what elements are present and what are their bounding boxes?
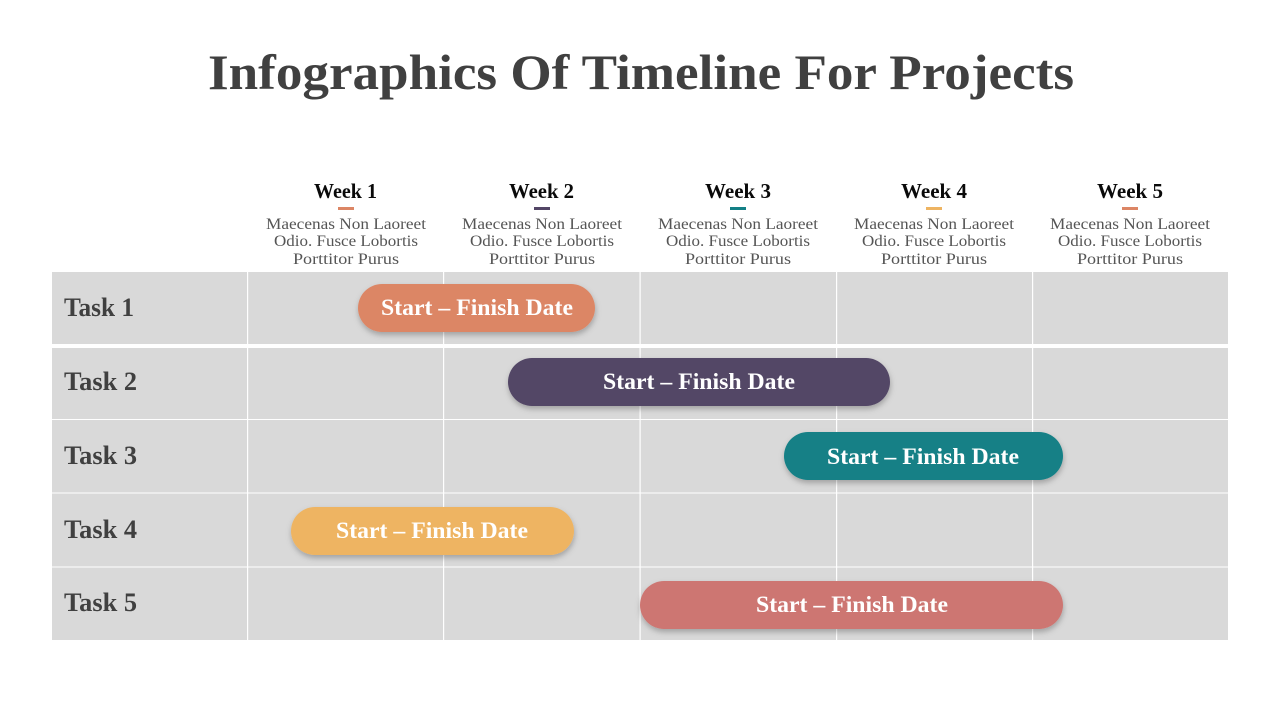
week 4 header: [854, 179, 1015, 268]
week 1 header: Week 1: [314, 179, 377, 203]
task 4 bar: [291, 507, 574, 555]
task labels: [64, 293, 137, 617]
week 2 header: Porttitor Purus: [489, 251, 595, 268]
week 4 header: Maecenas Non Laoreet: [854, 216, 1015, 233]
task labels: Task 4: [64, 515, 137, 544]
week 5 header: Odio. Fusce Lobortis: [1058, 233, 1202, 250]
week 4 header: Porttitor Purus: [881, 251, 987, 268]
week 3 header: Maecenas Non Laoreet: [658, 216, 819, 233]
task 2 bar: [508, 358, 890, 406]
week 4 header: Week 4: [901, 179, 967, 203]
task 4 bar: Start – Finish Date: [336, 518, 528, 543]
week 3 header: Week 3: [705, 179, 771, 203]
task 5 bar: [640, 581, 1063, 629]
week 3 header: [658, 179, 819, 268]
week 1 header: Odio. Fusce Lobortis: [274, 233, 418, 250]
week 2 header: Week 2: [509, 179, 574, 203]
task labels: Task 2: [64, 367, 137, 396]
week headers: [266, 179, 1211, 268]
task 2 bar: Start – Finish Date: [603, 369, 795, 394]
week 4 header: Odio. Fusce Lobortis: [862, 233, 1006, 250]
task labels: Task 3: [64, 441, 137, 470]
task 3 bar: [784, 432, 1063, 480]
week 5 header: Week 5: [1097, 179, 1163, 203]
task 1 bar: [358, 284, 595, 332]
task 5 bar: Start – Finish Date: [756, 592, 948, 617]
gantt grid: [52, 272, 1228, 640]
week 5 header: Maecenas Non Laoreet: [1050, 216, 1211, 233]
week 2 header: Odio. Fusce Lobortis: [470, 233, 614, 250]
week 1 header: Maecenas Non Laoreet: [266, 216, 427, 233]
week 5 header: Porttitor Purus: [1077, 251, 1183, 268]
week 2 header: [462, 179, 623, 268]
week 2 header: Maecenas Non Laoreet: [462, 216, 623, 233]
week 1 header: Porttitor Purus: [293, 251, 399, 268]
task 1 bar: Start – Finish Date: [381, 295, 573, 320]
task 3 bar: Start – Finish Date: [827, 444, 1019, 469]
week 3 header: Porttitor Purus: [685, 251, 791, 268]
task labels: Task 5: [64, 588, 137, 617]
title: Infographics Of Timeline For Projects: [208, 44, 1074, 100]
week 1 header: [266, 179, 427, 268]
task labels: Task 1: [64, 293, 134, 322]
week 5 header: [1050, 179, 1211, 268]
week 3 header: Odio. Fusce Lobortis: [666, 233, 810, 250]
